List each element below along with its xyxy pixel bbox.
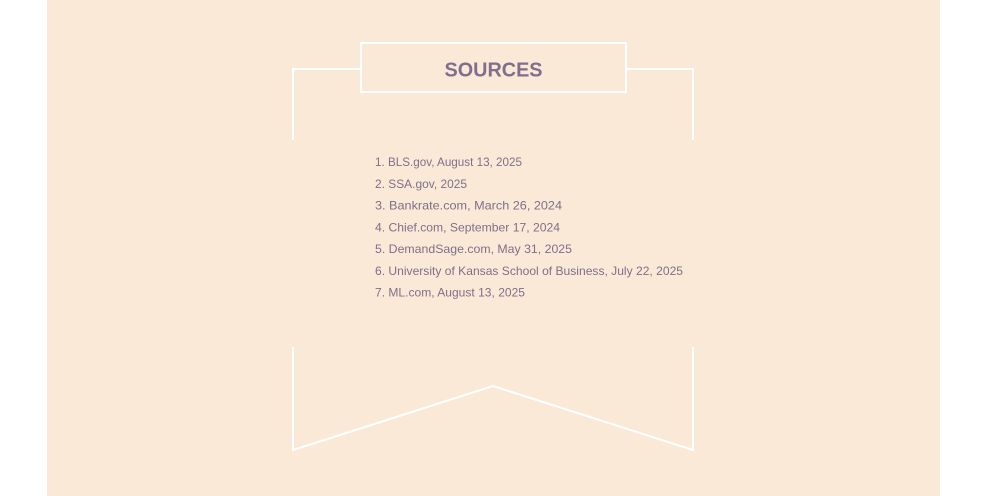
text block: source list (375, 155, 683, 300)
text block: source list: 5. DemandSage.com, May 31, 2025 (375, 242, 572, 256)
text block: source list: 4. Chief.com, September 17, 2024 (375, 220, 560, 234)
text block: source list: 7. ML.com, August 13, 2025 (375, 286, 525, 300)
title: SOURCES (444, 60, 542, 82)
text block: source list: 6. University of Kansas School of Business, July 22, 2025 (375, 264, 683, 278)
text block: source list: 3. Bankrate.com, March 26, 2024 (375, 198, 562, 212)
heading box (361, 43, 626, 92)
text block: source list: 2. SSA.gov, 2025 (375, 177, 467, 191)
text block: source list: 1. BLS.gov, August 13, 2025 (375, 155, 522, 169)
frame: ribbon banner outline (293, 69, 693, 450)
